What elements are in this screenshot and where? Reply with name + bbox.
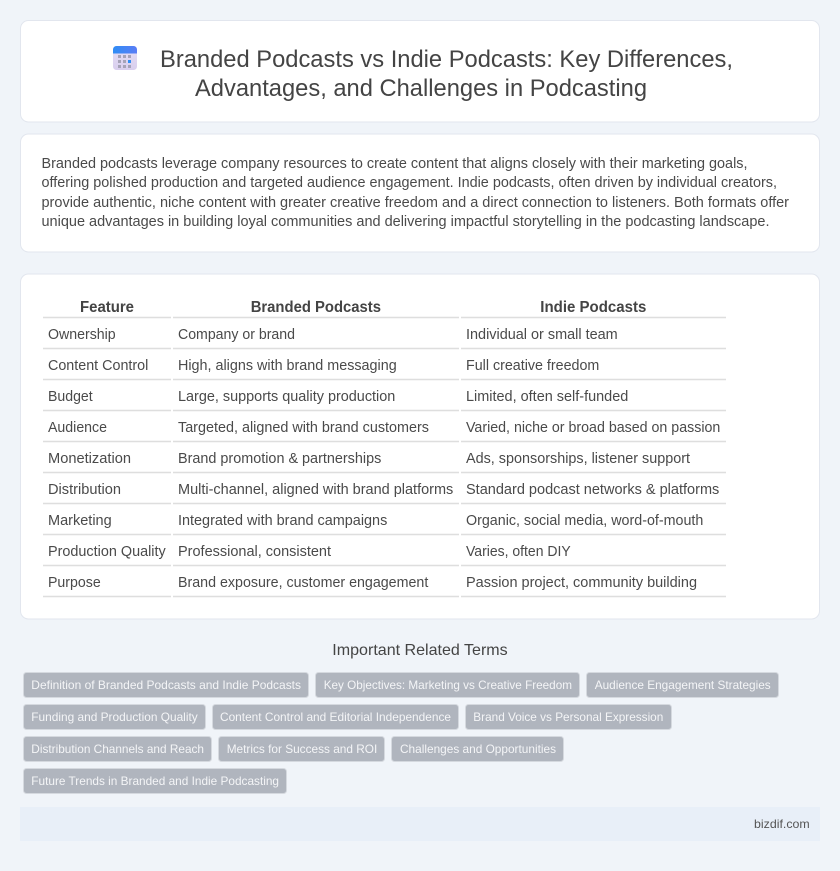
table row: Production Quality: [43, 544, 726, 566]
table row: Distribution: Distribution: [48, 482, 121, 498]
tag: Audience Engagement Strategies: [586, 672, 778, 698]
table row: Monetization: Ads, sponsorships, listener support: [466, 451, 690, 467]
tag: Definition of Branded Podcasts and Indie Podcasts: Definition of Branded Podcasts and Indie Podcasts: [31, 678, 301, 692]
table row: Purpose: Passion project, community building: [466, 575, 697, 591]
table header row: Branded Podcasts: [251, 299, 381, 316]
table row: Ownership: Ownership: [48, 327, 116, 343]
table row: Distribution: [43, 482, 726, 504]
tag: Distribution Channels and Reach: [24, 736, 212, 762]
table row: Ownership: Individual or small team: [466, 327, 618, 343]
tag: Challenges and Opportunities: [392, 736, 564, 762]
table row: Marketing: [43, 513, 726, 534]
table row: Budget: Limited, often self-funded: [466, 389, 628, 405]
table header row: Feature: [80, 299, 134, 316]
panel: title header: [20, 20, 820, 122]
table row: Production Quality: Varies, often DIY: [466, 544, 571, 560]
table row: Distribution: Multi-channel, aligned with brand platforms: [178, 482, 453, 498]
table row: Budget: Budget: [48, 389, 93, 405]
footer bar: [20, 807, 820, 841]
table row: Production Quality: Professional, consistent: [178, 544, 331, 560]
table row: Ownership: [43, 327, 726, 348]
table row: Content Control: High, aligns with brand messaging: [178, 358, 397, 374]
table row: Audience: [43, 420, 726, 442]
tag: Funding and Production Quality: [24, 704, 206, 730]
table row: Content Control: Content Control: [48, 358, 148, 374]
table row: Monetization: [43, 451, 726, 472]
table row: Purpose: [43, 575, 726, 596]
text block: introduction paragraph: unique advantages in building loyal communities and delivering impactful storytelling in the podcasting landscape.: [42, 214, 770, 230]
table row: Audience: Targeted, aligned with brand customers: [178, 420, 429, 436]
table row: Content Control: [43, 358, 726, 380]
table row: Monetization: Brand promotion & partnerships: [178, 451, 381, 467]
title: Branded Podcasts vs Indie Podcasts: Key Differences,: [160, 46, 733, 73]
tag: Brand Voice vs Personal Expression: [466, 704, 672, 730]
panel: comparison table: [20, 274, 820, 619]
table row: Marketing: Organic, social media, word-of-mouth: [466, 513, 703, 529]
table row: Purpose: Purpose: [48, 575, 101, 591]
table row: Ownership: Company or brand: [178, 327, 295, 343]
tag: Distribution Channels and Reach: Distribution Channels and Reach: [31, 742, 204, 756]
tag: Future Trends in Branded and Indie Podcasting: [24, 768, 286, 794]
table row: Budget: [43, 389, 726, 410]
table row: Monetization: Monetization: [48, 451, 131, 467]
icon: calendar: [113, 46, 137, 70]
tag: Content Control and Editorial Independence: [212, 704, 458, 730]
text block: introduction paragraph: offering polished production and targeted audience engagement. Indie podcasts, often driven by individual creators,: [42, 175, 777, 191]
tag: Content Control and Editorial Independence: Content Control and Editorial Independence: [220, 710, 451, 724]
table row: Audience: Audience: [48, 420, 107, 436]
tag: Metrics for Success and ROI: Metrics for Success and ROI: [227, 742, 377, 756]
related terms tags: [24, 672, 778, 794]
tag: Key Objectives: [316, 672, 580, 698]
table header row: Indie Podcasts: [540, 299, 646, 316]
table row: Distribution: Standard podcast networks & platforms: [466, 482, 719, 498]
tag: Key Objectives: Key Objectives: Marketing vs Creative Freedom: [324, 678, 572, 692]
table row: Marketing: Marketing: [48, 513, 112, 529]
panel: introduction: [20, 134, 820, 252]
footer source text: bizdif.com: [754, 817, 810, 831]
tag: Future Trends in Branded and Indie Podcasting: Future Trends in Branded and Indie Podcasting: [31, 774, 279, 788]
table row: Content Control: Full creative freedom: [466, 358, 599, 374]
tag: Challenges and Opportunities: Challenges and Opportunities: [400, 742, 556, 756]
heading: Important Related Terms: Important Related Terms: [332, 642, 508, 659]
table row: Purpose: Brand exposure, customer engagement: [178, 575, 428, 591]
tag: Funding and Production Quality: Funding and Production Quality: [31, 710, 198, 724]
text block: introduction paragraph: [42, 156, 789, 230]
table row: Marketing: Integrated with brand campaigns: [178, 513, 387, 529]
table row: Budget: Large, supports quality production: [178, 389, 395, 405]
text block: introduction paragraph: provide authentic, niche content with greater creative freedom and a direct connection to listeners. Both formats offer: [42, 195, 789, 211]
table row: Audience: Varied, niche or broad based on passion: [466, 420, 720, 436]
tag: Audience Engagement Strategies: Audience Engagement Strategies: [595, 678, 771, 692]
tag: Metrics for Success and ROI: [218, 736, 384, 762]
text block: introduction paragraph: Branded podcasts leverage company resources to create content that aligns closely with their marketing goals,: [42, 156, 748, 172]
tag: Definition of Branded Podcasts and Indie Podcasts: [24, 672, 308, 698]
title: Advantages, and Challenges in Podcasting: [195, 75, 647, 102]
table header row: [43, 299, 726, 318]
table row: Production Quality: Production Quality: [48, 544, 166, 560]
tag: Brand Voice vs Personal Expression: Brand Voice vs Personal Expression: [473, 710, 663, 724]
title: [160, 46, 733, 102]
